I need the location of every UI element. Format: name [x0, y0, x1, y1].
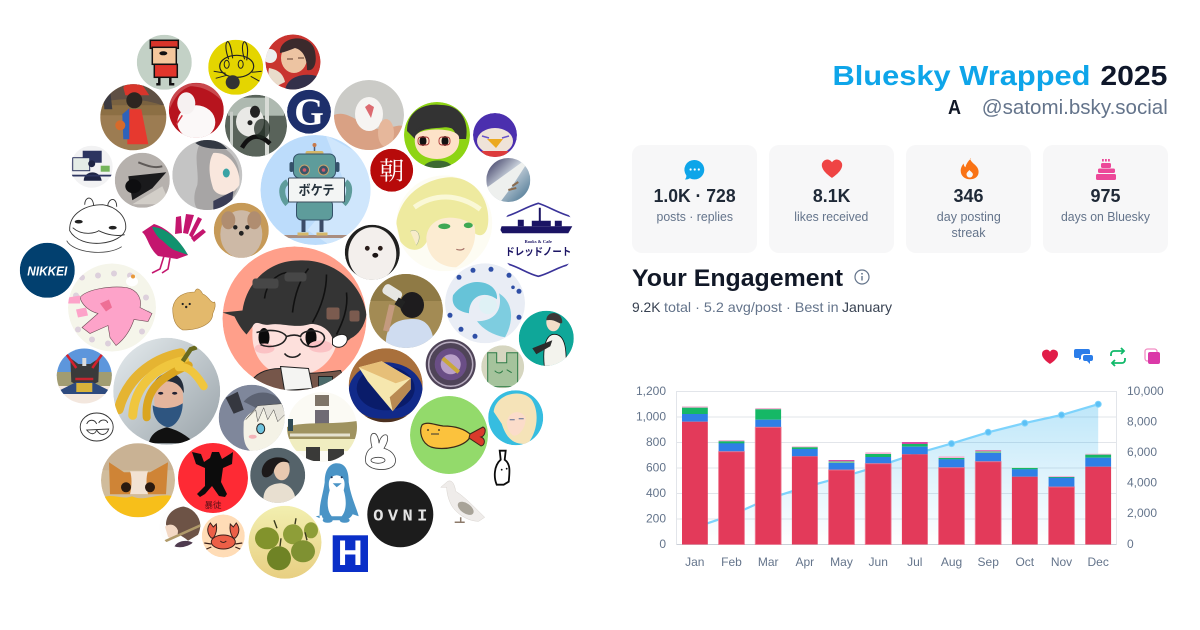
avatar: robot holding sign: ボケテ — [298, 183, 334, 198]
avatar: Asahi kanji logo — [370, 149, 413, 192]
panel: posts and replies card: posts · replies — [656, 210, 733, 224]
month labels: Nov — [1051, 555, 1072, 569]
left axis labels: 400 — [646, 486, 666, 500]
bar: Aug — [939, 456, 964, 544]
title: 2025 — [1100, 60, 1167, 91]
avatar: green pears on a table — [248, 506, 322, 579]
icon: heart — [822, 160, 842, 178]
avatar: blue swirl porcelain plate — [445, 263, 525, 343]
month labels: Jul — [907, 555, 922, 569]
avatar: small pomeranian — [173, 289, 215, 330]
icon: heart legend — [1042, 350, 1058, 364]
avatar: white ceramic bird — [441, 481, 485, 522]
bar: Feb — [719, 440, 744, 544]
cumulative area — [695, 404, 1098, 544]
right axis labels — [1127, 384, 1164, 551]
avatar: NIKKEI logo — [20, 243, 75, 298]
avatar: Guardian G logo — [287, 90, 331, 134]
avatar: white fluffy figure on red — [169, 83, 224, 139]
avatar: chiffon cake on blue plate — [349, 348, 423, 422]
bar: Jan — [682, 406, 708, 544]
avatar: purple round artwork — [425, 338, 477, 390]
month labels — [685, 555, 1109, 569]
month labels: Jan — [685, 555, 704, 569]
user handle: A — [948, 97, 961, 119]
left axis labels: 200 — [646, 512, 666, 526]
month labels: Apr — [795, 555, 814, 569]
panel: likes received card — [769, 145, 894, 253]
avatar: glasses character on lime — [404, 102, 470, 168]
avatar: airplane wing view — [486, 158, 530, 202]
avatar: magenta fantail bird logo — [142, 214, 206, 273]
avatar: white dog — [345, 225, 400, 281]
bar: Jul — [902, 442, 928, 544]
panel: posting streak card: 346 — [954, 186, 984, 206]
month labels: May — [830, 555, 853, 569]
avatar: Books and Cafe Dreadnought logo: Books & Cafe — [525, 239, 552, 244]
stacked bars — [682, 406, 1111, 544]
icon: speech bubble — [684, 160, 704, 179]
month labels: Jun — [869, 555, 888, 569]
icon: repost legend — [1111, 348, 1125, 366]
engagement summary text — [632, 299, 892, 315]
panel: days on Bluesky card — [1043, 145, 1168, 253]
chart: monthly engagement — [636, 384, 1164, 569]
cumulative line — [695, 401, 1101, 528]
avatar: blue H logo: H — [338, 534, 363, 573]
panel: likes received card: likes received — [794, 210, 868, 224]
avatar: black silhouette on red — [178, 443, 248, 513]
avatar: boy with cap and red cape — [99, 83, 167, 151]
avatar: orange cat behind yellow blanket — [101, 443, 175, 517]
avatar: man photographing with telephoto lens — [369, 274, 443, 348]
panel: posting streak card: day posting — [937, 210, 1001, 224]
avatar: green block face — [481, 345, 524, 388]
month labels: Dec — [1088, 555, 1109, 569]
avatar: NIKKEI logo: NIKKEI — [27, 263, 68, 278]
panel: days on Bluesky card: 975 — [1090, 186, 1120, 206]
avatar: victorian lady portrait — [250, 448, 305, 503]
panel: days on Bluesky card: days on Bluesky — [1061, 210, 1151, 224]
avatar: black cat on bedding — [115, 153, 170, 208]
avatar: hand drawn white rabbit — [66, 198, 126, 253]
panel: avatar bubble cluster — [20, 34, 577, 579]
avatar: blue penguin — [316, 463, 359, 523]
right axis labels: 0 — [1127, 537, 1134, 551]
left axis labels — [636, 384, 666, 551]
left axis labels: 600 — [646, 460, 666, 474]
avatar: black outline bottle — [495, 451, 509, 485]
avatar: Guardian G logo: G — [294, 92, 324, 134]
engagement summary text: 9.2K — [632, 299, 661, 315]
avatar: man on teal background — [519, 311, 574, 366]
right axis labels: 4,000 — [1127, 476, 1157, 490]
left axis labels: 1,200 — [636, 384, 666, 398]
icon: replies legend — [1074, 349, 1093, 364]
avatar: fried shrimp on green — [410, 396, 488, 474]
bar: Dec — [1085, 454, 1111, 544]
avatar: smiling hand drawn face — [80, 413, 113, 441]
avatar: white haired character with grey cap — [219, 385, 286, 452]
engagement summary text: January — [842, 299, 892, 315]
avatar: anime man on red — [263, 34, 320, 90]
avatar: pink axolotl on dotted paper — [68, 264, 156, 352]
right axis labels: 2,000 — [1127, 506, 1157, 520]
avatar: panda in a glass case — [225, 95, 287, 158]
bar: May — [829, 460, 854, 544]
avatar: main profile character with glasses — [222, 246, 366, 390]
user handle: @satomi.bsky.social — [982, 97, 1168, 119]
avatar: OVNI logo — [367, 481, 434, 548]
avatar: purple penguin — [473, 113, 517, 157]
icon: quote legend — [1145, 349, 1160, 364]
panel: posts and replies card — [632, 145, 757, 253]
avatar: village illustration — [287, 392, 357, 462]
avatar: anime side profile with sword — [159, 506, 202, 548]
avatar: Asahi kanji logo: 朝 — [379, 151, 404, 187]
right axis labels: 6,000 — [1127, 445, 1157, 459]
left axis labels: 800 — [646, 435, 666, 449]
panel: posts and replies card: 1.0K · 728 — [654, 186, 736, 206]
heading: Your Engagement: Your Engagement — [632, 265, 843, 292]
avatar: yellow rabbit sketch — [208, 40, 263, 95]
avatar: fluffy brown dog — [214, 203, 269, 258]
avatar: red capped box man — [137, 35, 192, 90]
title: Bluesky Wrapped — [832, 60, 1090, 91]
panel: posting streak card — [906, 145, 1031, 253]
panel: posting streak card: streak — [952, 226, 986, 240]
avatar: Books and Cafe Dreadnought logo — [500, 202, 572, 278]
left axis labels: 1,000 — [636, 410, 666, 424]
avatar: red crab on peach — [202, 514, 245, 558]
avatar: small hand drawn rabbit — [365, 433, 396, 470]
chart legend icons — [1042, 348, 1160, 366]
avatar: OVNI logo: OVNI — [373, 507, 427, 526]
month labels: Mar — [758, 555, 779, 569]
right axis labels: 10,000 — [1127, 384, 1164, 398]
icon: info — [855, 270, 869, 284]
right axis labels: 8,000 — [1127, 414, 1157, 428]
month labels: Oct — [1015, 555, 1035, 569]
bar: Mar — [755, 408, 781, 544]
avatar: silver haired anime girl — [172, 140, 242, 211]
avatar: office computer illustration — [71, 146, 113, 188]
bar: Nov — [1049, 476, 1074, 544]
bar: Jun — [865, 452, 891, 544]
avatar: blonde man with aqua background — [488, 390, 543, 445]
icon: birthday cake — [1096, 159, 1116, 180]
avatar: Books and Cafe Dreadnought logo: ドレッドノート — [505, 246, 571, 258]
month labels: Aug — [941, 555, 962, 569]
bar: Oct — [1012, 467, 1038, 544]
avatar: blonde watercolor portrait — [396, 175, 492, 271]
month labels: Sep — [978, 555, 999, 569]
bar: Apr — [792, 446, 818, 544]
bar: Sep — [975, 450, 1001, 544]
left axis labels: 0 — [659, 537, 666, 551]
panel: likes received card: 8.1K — [813, 186, 850, 206]
avatar: man with bananas on head — [113, 338, 220, 445]
avatar: black silhouette on red: 暴徒 — [204, 500, 222, 510]
avatar: white bird on hand — [334, 80, 405, 151]
icon: flame — [961, 158, 979, 179]
avatar: robot holding sign — [260, 135, 370, 245]
engagement summary text: total · 5.2 avg/post · Best in — [664, 299, 839, 315]
month labels: Feb — [721, 555, 742, 569]
avatar: hero mask in landscape — [56, 348, 112, 404]
